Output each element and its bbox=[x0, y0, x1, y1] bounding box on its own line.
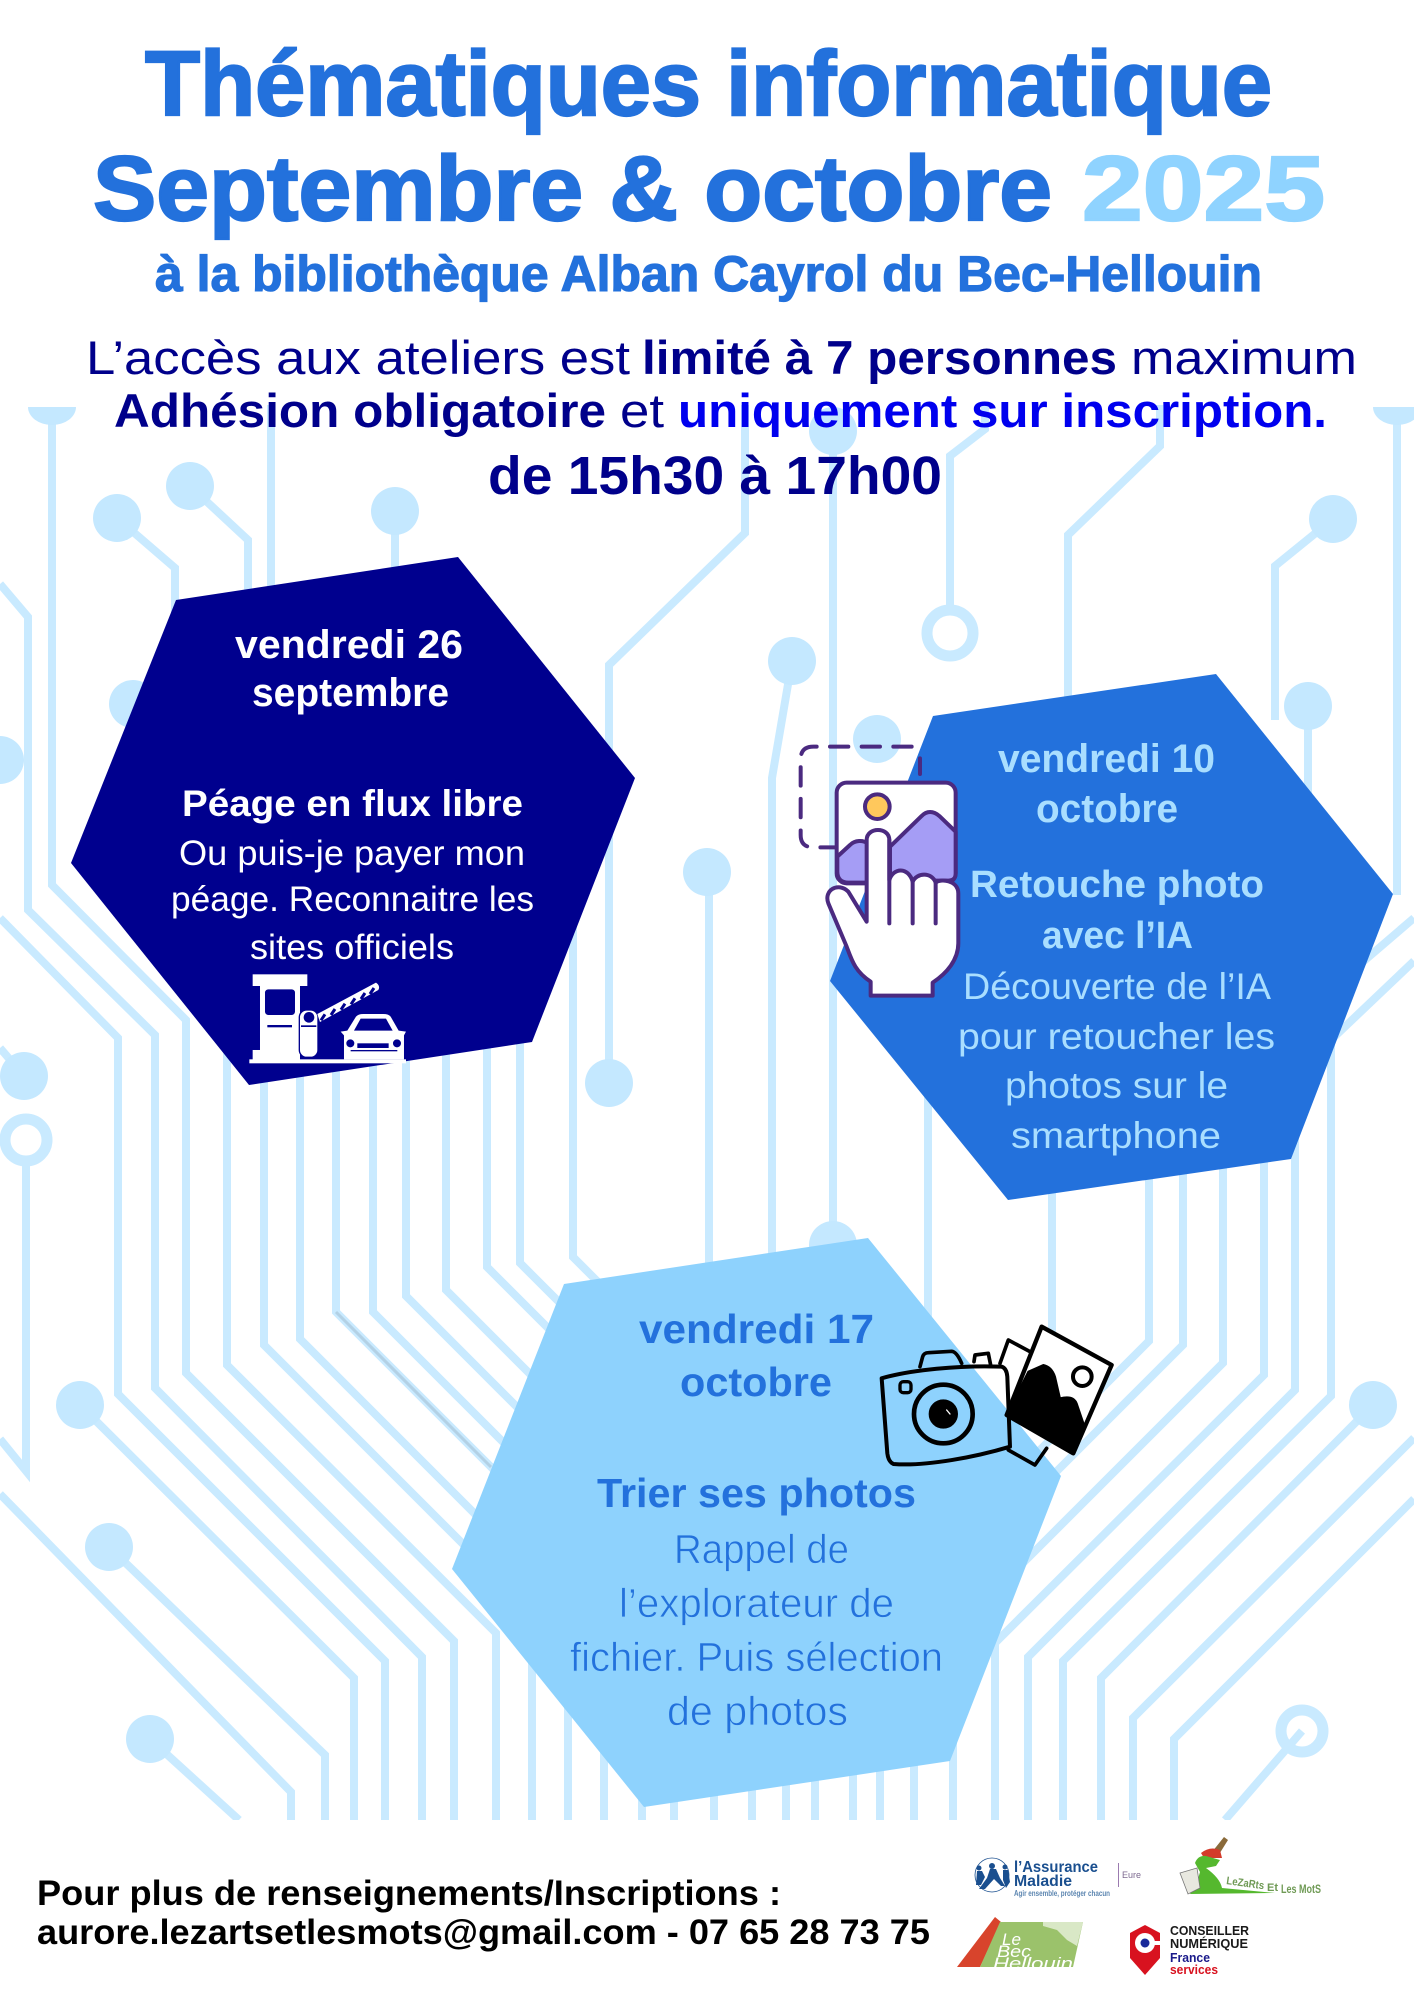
icon: camera and photos bbox=[882, 1327, 1112, 1465]
workshop description: péage. Reconnaitre les bbox=[171, 880, 534, 919]
footer contact text bbox=[37, 1874, 930, 1952]
access conditions text: de 15h30 à 17h00 bbox=[488, 446, 942, 506]
workshop description: Rappel de bbox=[674, 1526, 849, 1572]
icon: hand touching photo bbox=[801, 747, 958, 996]
date: vendredi 17 bbox=[639, 1306, 874, 1352]
logo: Conseiller numérique France services: CONSEILLER bbox=[1170, 1923, 1250, 1938]
access conditions text: maximum bbox=[1131, 331, 1357, 384]
access conditions text: L’accès aux ateliers est bbox=[86, 331, 630, 384]
title: Septembre & octobre bbox=[93, 138, 1052, 240]
logo: Le Bec Hellouin bbox=[957, 1917, 1083, 1967]
access conditions text bbox=[86, 331, 1357, 506]
logo: Le Bec Hellouin: Bec bbox=[997, 1942, 1032, 1961]
workshop heading: Péage en flux libre bbox=[182, 783, 523, 824]
workshop description bbox=[570, 1526, 943, 1734]
title: Thématiques informatique bbox=[145, 33, 1272, 135]
panel: vendredi 10 octobre bbox=[801, 674, 1393, 1200]
date bbox=[998, 737, 1215, 831]
workshop heading: Trier ses photos bbox=[597, 1470, 916, 1516]
workshop description: smartphone bbox=[1011, 1115, 1221, 1156]
date: vendredi 10 bbox=[998, 737, 1215, 781]
access conditions text: Adhésion obligatoire bbox=[114, 384, 606, 437]
date bbox=[235, 623, 463, 715]
workshop description: photos sur le bbox=[1005, 1065, 1228, 1106]
date: vendredi 26 bbox=[235, 623, 463, 667]
workshop description: Découverte de l’IA bbox=[963, 966, 1271, 1007]
logo: l'Assurance Maladie Eure: Agir ensemble, protéger chacun bbox=[1014, 1889, 1110, 1898]
workshop heading: Retouche photo bbox=[970, 864, 1264, 906]
workshop description: sites officiels bbox=[250, 928, 454, 967]
footer contact text: Pour plus de renseignements/Inscriptions : bbox=[37, 1874, 781, 1913]
logo: Le Bec Hellouin: Le bbox=[1002, 1930, 1021, 1949]
logo: l'Assurance Maladie Eure: Eure bbox=[1122, 1870, 1141, 1880]
title: 2025 bbox=[1082, 138, 1325, 240]
logo: l'Assurance Maladie Eure: l’Assurance bbox=[1014, 1859, 1098, 1876]
date bbox=[639, 1306, 874, 1405]
workshop description: Ou puis-je payer mon bbox=[179, 834, 525, 873]
logo: Conseiller numérique France services: France bbox=[1170, 1950, 1210, 1965]
workshop description: pour retoucher les bbox=[958, 1016, 1275, 1057]
date: octobre bbox=[1036, 787, 1178, 831]
logo: Conseiller numérique France services: NUMÉRIQUE bbox=[1170, 1936, 1248, 1951]
date: septembre bbox=[252, 671, 449, 715]
workshop description: de photos bbox=[667, 1688, 848, 1734]
icon: toll booth and car bbox=[249, 974, 406, 1063]
panel: vendredi 17 octobre bbox=[452, 1238, 1112, 1807]
logo: Lézarts et les Mots bbox=[1180, 1837, 1321, 1896]
access conditions text: et bbox=[620, 384, 664, 437]
logo: l'Assurance Maladie Eure bbox=[975, 1858, 1141, 1898]
logo: Conseiller numérique France services bbox=[1130, 1923, 1250, 1977]
workshop description: fichier. Puis sélection bbox=[570, 1634, 943, 1680]
access conditions text: limité à 7 personnes bbox=[642, 331, 1117, 384]
background: circuit board pattern bbox=[0, 405, 1414, 1820]
date: octobre bbox=[680, 1359, 832, 1405]
logo: Le Bec Hellouin: Hellouin bbox=[993, 1954, 1073, 1973]
subtitle: venue: à la bibliothèque Alban Cayrol du Bec-Hellouin bbox=[155, 246, 1262, 302]
footer contact text: aurore.lezartsetlesmots@gmail.com - 07 65 28 73 75 bbox=[37, 1913, 930, 1952]
workshop heading: avec l’IA bbox=[1042, 915, 1193, 957]
workshop description: l’explorateur de bbox=[619, 1580, 894, 1626]
logo: l'Assurance Maladie Eure: Maladie bbox=[1014, 1873, 1072, 1890]
access conditions text: uniquement sur inscription. bbox=[678, 384, 1327, 437]
workshop description bbox=[958, 966, 1275, 1156]
logo: Lézarts et les Mots: LeZaRts bbox=[1226, 1875, 1265, 1892]
logo: Lézarts et les Mots: Les MotS bbox=[1281, 1882, 1321, 1896]
logo: Conseiller numérique France services: services bbox=[1170, 1962, 1218, 1977]
panel: vendredi 26 septembre bbox=[71, 557, 635, 1085]
workshop description bbox=[171, 834, 534, 967]
title bbox=[93, 33, 1325, 240]
workshop heading bbox=[970, 864, 1264, 957]
logo: Lézarts et les Mots: Et bbox=[1267, 1882, 1278, 1894]
